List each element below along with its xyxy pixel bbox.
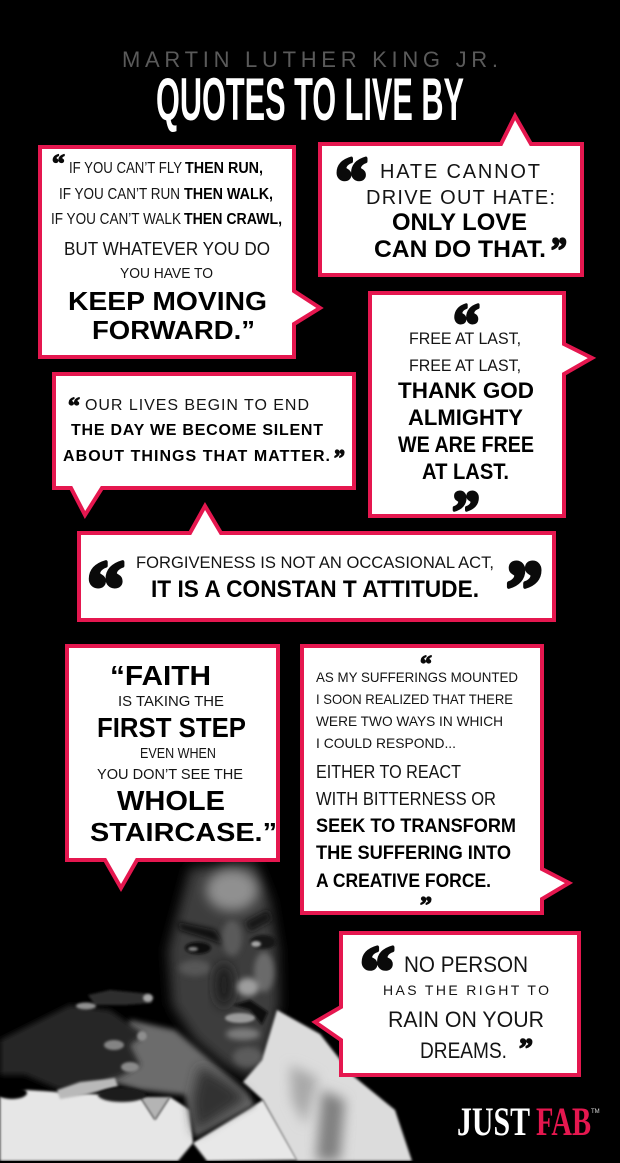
closing quote mark: ”: [452, 479, 480, 545]
quote text: [136, 554, 494, 603]
quote text: FREE AT LAST,: [409, 356, 521, 375]
quote text: YOU HAVE TO: [120, 265, 213, 282]
closing quote mark: ”: [334, 446, 345, 472]
header: title block: [122, 47, 498, 133]
logo: JustFab: TM: [591, 1109, 600, 1115]
quote text: WE ARE FREE: [398, 432, 534, 457]
speech bubble: [370, 293, 592, 516]
quote text: CAN DO THAT.: [374, 236, 546, 263]
quote text: SEEK TO TRANSFORM: [316, 816, 516, 837]
quote text: RAIN ON YOUR: [388, 1007, 544, 1032]
quote text: [398, 329, 534, 484]
subtitle: MARTIN LUTHER KING JR.: [122, 47, 498, 72]
quote text: IT IS A CONSTAN T ATTITUDE.: [151, 576, 479, 603]
quote text: ALMIGHTY: [408, 405, 523, 430]
closing quote mark: ”: [519, 1033, 533, 1065]
quote text: FORGIVENESS IS NOT AN OCCASIONAL ACT,: [136, 554, 494, 572]
quote text: WERE TWO WAYS IN WHICH: [316, 713, 503, 729]
quote text: ABOUT THINGS THAT MATTER.: [63, 448, 330, 465]
quote text: THEN RUN,: [185, 160, 263, 177]
quote text: HAS THE RIGHT TO: [383, 982, 549, 998]
quote text: THEN WALK,: [184, 186, 273, 203]
quote text: I SOON REALIZED THAT THERE: [316, 691, 513, 707]
speech bubble: [315, 933, 579, 1075]
closing quote mark: ”: [420, 893, 432, 919]
quote text: [366, 161, 555, 263]
quote text: KEEP MOVING: [68, 286, 267, 316]
quote text: EITHER TO REACT: [316, 761, 461, 782]
quote text: HATE CANNOT: [380, 161, 540, 183]
opening quote mark: “: [87, 546, 125, 634]
closing quote mark: ”: [551, 230, 567, 270]
quote text: IF YOU CAN’T FLY: [69, 160, 182, 177]
speech bubble: [67, 646, 278, 888]
quote text: [383, 952, 549, 1063]
logo: JustFab: FAB: [536, 1099, 591, 1144]
photo: Martin Luther King Jr. portrait: [0, 862, 412, 1161]
quote text: FORWARD.”: [92, 315, 255, 345]
speech bubble: [320, 116, 582, 275]
speech bubble: [40, 147, 320, 357]
opening quote mark: “: [360, 931, 395, 1011]
quote text: AT LAST.: [422, 459, 509, 484]
logo: JustFab: [457, 1099, 600, 1144]
quote text: WITH BITTERNESS OR: [316, 788, 496, 809]
quote text: AS MY SUFFERINGS MOUNTED: [316, 669, 518, 685]
quote text: ONLY LOVE: [392, 209, 527, 236]
panel: suffering quote: [302, 646, 569, 919]
opening quote mark: “: [52, 149, 65, 178]
quote text: [90, 660, 277, 847]
quote text: “FAITH: [110, 660, 211, 691]
closing quote mark: ”: [506, 546, 543, 634]
quote text: A CREATIVE FORCE.: [316, 871, 491, 892]
quote text: STAIRCASE.”: [90, 817, 277, 847]
panel: free at last quote: [370, 292, 592, 545]
quote text: FREE AT LAST,: [409, 329, 521, 348]
quote text: [51, 160, 282, 345]
quote text: BUT WHATEVER YOU DO: [64, 239, 270, 259]
quote text: I COULD RESPOND...: [316, 735, 456, 751]
panel: our lives begin to end quote: [54, 374, 354, 515]
quote text: IF YOU CAN’T WALK: [51, 211, 182, 228]
speech bubble: [79, 506, 554, 620]
quote text: IF YOU CAN’T RUN: [59, 186, 180, 203]
quote text: WHOLE: [117, 785, 225, 816]
opening quote mark: “: [68, 394, 80, 420]
quote text: OUR LIVES BEGIN TO END: [85, 397, 309, 414]
logo: JustFab: JUST: [457, 1099, 530, 1144]
quote text: [63, 397, 330, 465]
quote text: NO PERSON: [404, 952, 528, 977]
quote text: DREAMS.: [420, 1038, 507, 1063]
panel: faith quote: [67, 646, 278, 888]
quote text: THE SUFFERING INTO: [316, 843, 511, 864]
opening quote mark: “: [420, 652, 432, 678]
quote text: FIRST STEP: [97, 712, 246, 743]
panel: hate cannot drive out hate quote: [320, 116, 582, 275]
panel: no person has the right quote: [315, 931, 579, 1075]
speech bubble: [302, 646, 569, 913]
quote text: DRIVE OUT HATE:: [366, 187, 555, 209]
opening quote mark: “: [453, 292, 480, 358]
panel: forgiveness quote: [79, 506, 554, 634]
quote text: THANK GOD: [398, 378, 534, 403]
quote text: EVEN WHEN: [140, 746, 216, 762]
quote text: IS TAKING THE: [118, 694, 224, 710]
speech bubble: [54, 374, 354, 515]
quote text: THE DAY WE BECOME SILENT: [71, 422, 323, 439]
quote text: [316, 669, 518, 892]
quote text: YOU DON’T SEE THE: [97, 767, 243, 783]
quote text: THEN CRAWL,: [184, 211, 282, 228]
opening quote mark: “: [335, 144, 368, 221]
panel: keep moving forward quote: [40, 147, 320, 357]
